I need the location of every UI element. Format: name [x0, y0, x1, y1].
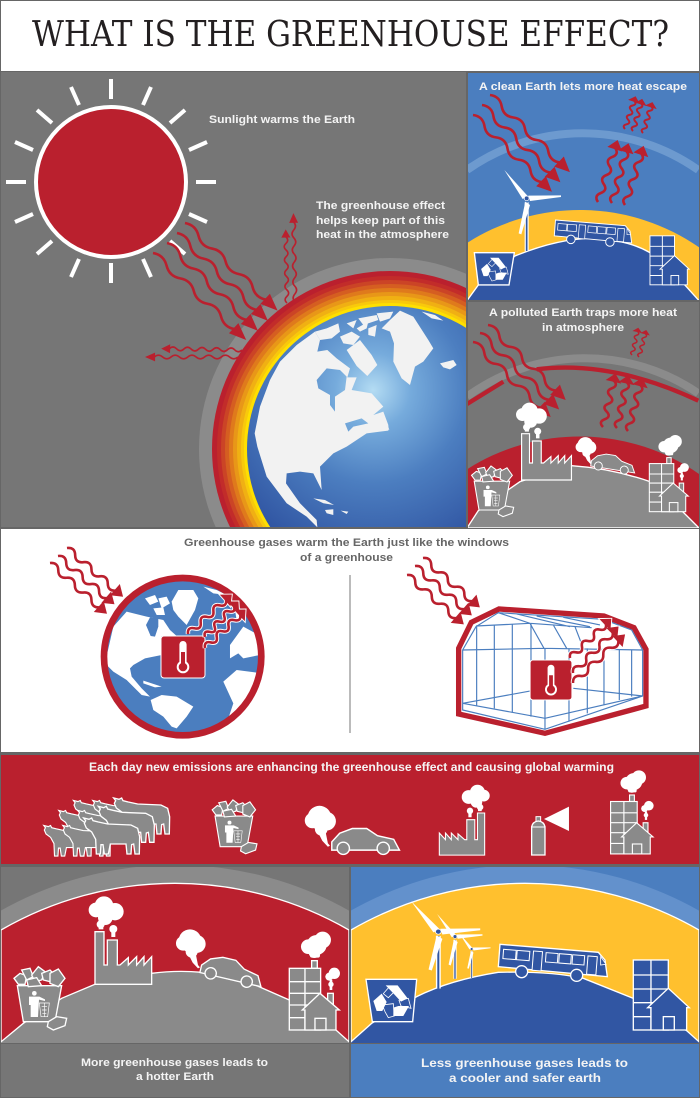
red dome	[1, 883, 349, 1045]
panel: sunlight and Earth	[1, 72, 466, 527]
text: emissions heading: Each day new emissions are enhancing the greenhouse effect and causing global warming	[89, 762, 614, 774]
icon: car with exhaust	[576, 437, 637, 476]
panel: emission sources	[1, 755, 699, 864]
icon: globe with thermometer	[104, 578, 262, 735]
icon: factory with smoke	[516, 403, 571, 480]
ground	[0, 971, 350, 1047]
ground	[467, 238, 699, 301]
text: greenhouse effect explanation: The greenhouse effect	[316, 200, 445, 212]
icon: bus	[498, 944, 607, 981]
text: hotter Earth caption: a hotter Earth	[136, 1071, 214, 1083]
icon: aerosol can	[532, 807, 569, 855]
panel: clean future	[343, 865, 700, 1097]
text: hotter Earth caption: More greenhouse gases leads to	[81, 1057, 268, 1069]
text: sunlight warms the Earth: Sunlight warms the Earth	[209, 114, 355, 126]
text: comparison heading: of a greenhouse	[300, 552, 393, 564]
arrows: reflected heat	[147, 215, 298, 360]
icon: overflowing trash bin	[472, 466, 514, 517]
text: cooler Earth caption: Less greenhouse gases leads to	[421, 1056, 628, 1070]
icon: polluting building and house	[649, 435, 689, 512]
text: polluted Earth heading: in atmosphere	[542, 322, 624, 334]
text: greenhouse effect explanation	[316, 200, 449, 241]
ground	[350, 972, 700, 1047]
icon: trash bin	[212, 800, 257, 854]
panel: clean Earth	[465, 72, 700, 301]
atmosphere band	[351, 867, 699, 929]
panel: greenhouse comparison	[1, 529, 699, 752]
Earth globe with atmosphere rings	[199, 258, 466, 527]
icon: overflowing trash bin	[14, 967, 67, 1030]
icon: polluting building and house	[289, 932, 340, 1030]
arrows: heat entering globe	[47, 544, 125, 616]
icon: wind turbine	[504, 170, 561, 251]
icon: building and house	[650, 236, 689, 285]
text: clean Earth heading: A clean Earth lets more heat escape	[479, 81, 687, 93]
text: hotter Earth caption	[81, 1057, 268, 1083]
text: cooler Earth caption: a cooler and safer earth	[449, 1071, 601, 1085]
arrows: incoming heat	[470, 91, 571, 193]
icon: car with exhaust	[176, 929, 265, 991]
atmosphere band	[467, 133, 698, 170]
red atmosphere dome	[465, 436, 700, 530]
arrows: heat trapped in globe	[185, 592, 248, 652]
icon: building and house	[633, 960, 689, 1030]
divider	[350, 575, 351, 733]
icon: building and house	[611, 770, 654, 854]
arrows: small escaping heat	[629, 328, 649, 358]
atmosphere band	[1, 867, 349, 929]
icons: wind turbines	[411, 901, 491, 989]
text: polluted Earth heading: A polluted Earth traps more heat	[489, 307, 677, 319]
yellow dome	[351, 883, 699, 1045]
caption panel	[351, 1044, 699, 1097]
icon: greenhouse	[459, 609, 646, 733]
icon: factory	[89, 896, 152, 984]
yellow atmosphere dome	[465, 210, 700, 300]
text: polluted Earth heading	[489, 307, 677, 334]
text: greenhouse effect explanation: heat in the atmosphere	[316, 229, 449, 241]
arrows: incoming sunlight	[150, 219, 279, 341]
panel: polluted Earth	[465, 301, 700, 530]
arrows: escaping heat	[593, 140, 648, 207]
text: comparison heading	[184, 537, 509, 564]
text: comparison heading: Greenhouse gases warm the Earth just like the windows	[184, 537, 509, 549]
arrows: heat trapped in greenhouse	[567, 617, 627, 687]
atmosphere band	[467, 358, 698, 397]
icon: factory	[439, 785, 490, 855]
icon: recycling bin	[474, 253, 514, 285]
arrows: heat entering greenhouse	[404, 554, 481, 627]
ground	[467, 466, 699, 528]
icon: sun	[6, 79, 216, 283]
arrows: heat leaving atmosphere	[622, 97, 655, 134]
panel: polluted future	[0, 865, 357, 1097]
arrows: rising heat	[598, 374, 647, 432]
icon: car with exhaust	[305, 806, 399, 854]
trapped heat line	[467, 368, 698, 404]
text: greenhouse effect explanation: helps keep part of this	[316, 215, 445, 227]
arrows: incoming heat	[470, 321, 567, 419]
icon: bus	[554, 220, 632, 246]
caption panel	[1, 1044, 349, 1097]
icon: cattle herd	[44, 798, 170, 856]
title banner	[1, 1, 699, 71]
text: cooler Earth caption	[421, 1056, 628, 1085]
icon: recycling bin	[366, 979, 417, 1022]
